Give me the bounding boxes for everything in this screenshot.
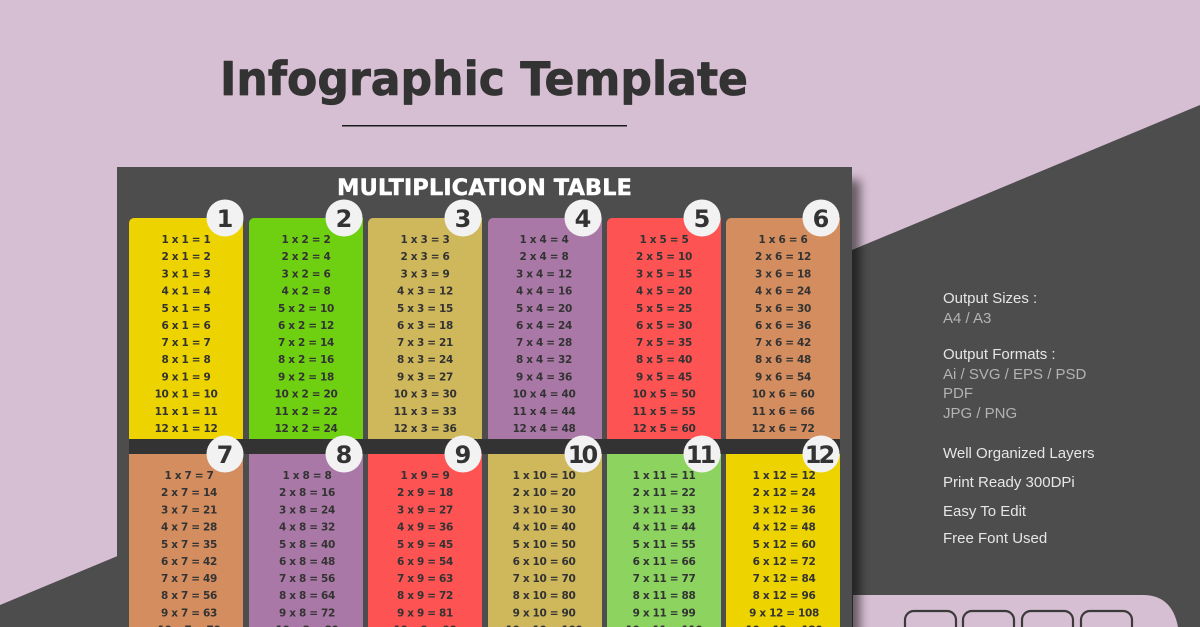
card 1: 4 x 1 = 4 [162,286,211,298]
card 5 [607,200,721,439]
card 2: 11 x 2 = 22 [275,406,337,418]
card 8: 3 x 8 = 24 [279,504,335,516]
format icons [905,611,1132,627]
card 2: 3 x 2 = 6 [282,268,331,280]
card 7 [129,436,244,627]
card 10: 3 x 10 = 30 [513,504,575,516]
card 4: 3 x 4 = 12 [516,268,572,280]
output details text: Output Sizes : [943,290,1037,307]
card 6: 9 x 6 = 54 [755,372,811,384]
card 1: 3 x 1 = 3 [162,268,211,280]
card 10: 10 [568,441,597,469]
card 3: 8 x 3 = 24 [397,354,453,366]
card 4: 8 x 4 = 32 [516,354,572,366]
bottom pill panel [853,595,1178,627]
card 5: 4 x 5 = 20 [636,286,692,298]
card 8: 9 x 8 = 72 [279,608,335,620]
card 7: 1 x 7 = 7 [165,470,214,482]
card 9: 8 x 9 = 72 [397,590,453,602]
card 11: 11 [686,441,715,469]
title: Infographic Template [220,52,748,106]
card 3: 11 x 3 = 33 [394,406,456,418]
card 12: 9 x 12 = 108 [749,608,819,620]
card 7: 7 x 7 = 49 [161,573,217,585]
card 9: 4 x 9 = 36 [397,522,453,534]
card 7: 9 x 7 = 63 [161,608,217,620]
card 1: 12 x 1 = 12 [155,423,217,435]
card 4: 7 x 4 = 28 [516,337,572,349]
card 3: 2 x 3 = 6 [401,251,450,263]
card 2: 1 x 2 = 2 [282,234,331,246]
card 7: 7 [217,441,233,469]
card 4 [488,200,602,439]
card 9: 2 x 9 = 18 [397,487,453,499]
card 7: 4 x 7 = 28 [161,522,217,534]
card 11: 9 x 11 = 99 [633,608,695,620]
card 1 [129,200,244,439]
card 1: 8 x 1 = 8 [162,354,211,366]
card 2: 8 x 2 = 16 [278,354,334,366]
card 3: 12 x 3 = 36 [394,423,456,435]
card 4: 1 x 4 = 4 [520,234,569,246]
card 8: 1 x 8 = 8 [283,470,332,482]
card 5: 9 x 5 = 45 [636,372,692,384]
card 12: 6 x 12 = 72 [753,556,815,568]
card 9 [368,436,482,627]
card 8: 8 [336,441,352,469]
card 9: 9 [455,441,471,469]
card 7: 8 x 7 = 56 [161,590,217,602]
card 10: 1 x 10 = 10 [513,470,575,482]
output details text: Easy To Edit [943,503,1027,520]
card 10: 2 x 10 = 20 [513,487,575,499]
card 1: 1 x 1 = 1 [162,234,211,246]
card 5: 3 x 5 = 15 [636,268,692,280]
card 9: 1 x 9 = 9 [401,470,450,482]
card 4: 10 x 4 = 40 [513,388,575,400]
card 9: 9 x 9 = 81 [397,608,453,620]
title underline [342,125,627,126]
card 2: 2 x 2 = 4 [282,251,331,263]
card 3: 7 x 3 = 21 [397,337,453,349]
card 12: 4 x 12 = 48 [753,522,815,534]
card 12: 7 x 12 = 84 [753,573,815,585]
card 4: 2 x 4 = 8 [520,251,569,263]
card 4: 6 x 4 = 24 [516,320,572,332]
poster heading: MULTIPLICATION TABLE [337,176,632,201]
card 8: 2 x 8 = 16 [279,487,335,499]
card 11: 4 x 11 = 44 [633,522,695,534]
card 11: 2 x 11 = 22 [633,487,695,499]
card 6: 8 x 6 = 48 [755,354,811,366]
card 3: 9 x 3 = 27 [397,372,453,384]
output details text: Print Ready 300DPi [943,474,1075,491]
card 1: 5 x 1 = 5 [162,303,211,315]
card 12: 12 [805,441,833,469]
card 2: 2 [336,205,352,233]
card 3: 1 x 3 = 3 [401,234,450,246]
card 4: 4 x 4 = 16 [516,286,572,298]
card 12 [726,436,840,627]
card 10: 6 x 10 = 60 [513,556,575,568]
card 10 [488,436,602,627]
card 12: 8 x 12 = 96 [753,590,815,602]
output details text: Free Font Used [943,530,1047,547]
card 5: 8 x 5 = 40 [636,354,692,366]
card 2 [249,200,363,439]
card 11: 3 x 11 = 33 [633,504,695,516]
card 7: 3 x 7 = 21 [161,504,217,516]
card 5: 10 x 5 = 50 [633,388,695,400]
card 11: 6 x 11 = 66 [633,556,695,568]
card 6: 11 x 6 = 66 [752,406,814,418]
card 10: 7 x 10 = 70 [513,573,575,585]
card 2: 12 x 2 = 24 [275,423,337,435]
card 11: 5 x 11 = 55 [633,539,695,551]
card 3: 3 [455,205,471,233]
card 5: 7 x 5 = 35 [636,337,692,349]
output details text [943,290,1094,547]
card 5: 12 x 5 = 60 [633,423,695,435]
card 7: 5 x 7 = 35 [161,539,217,551]
card 1: 2 x 1 = 2 [162,251,211,263]
card 6: 7 x 6 = 42 [755,337,811,349]
card 5: 5 x 5 = 25 [636,303,692,315]
output details text: PDF [943,385,973,402]
card 12: 5 x 12 = 60 [753,539,815,551]
card 2: 9 x 2 = 18 [278,372,334,384]
card 3: 4 x 3 = 12 [397,286,453,298]
card 11: 7 x 11 = 77 [633,573,695,585]
card 5: 2 x 5 = 10 [636,251,692,263]
card 6: 1 x 6 = 6 [759,234,808,246]
card 4: 9 x 4 = 36 [516,372,572,384]
card 3: 3 x 3 = 9 [401,268,450,280]
card 10: 4 x 10 = 40 [513,522,575,534]
card 3: 6 x 3 = 18 [397,320,453,332]
card 2: 4 x 2 = 8 [282,286,331,298]
card 2: 6 x 2 = 12 [278,320,334,332]
output details text: Well Organized Layers [943,445,1094,462]
card 1: 7 x 1 = 7 [162,337,211,349]
card 10: 8 x 10 = 80 [513,590,575,602]
card 7: 2 x 7 = 14 [161,487,217,499]
poster shadow [844,180,860,627]
card 5: 11 x 5 = 55 [633,406,695,418]
card 3 [368,200,482,439]
card 6: 6 x 6 = 36 [755,320,811,332]
card 11 [607,436,721,627]
card 3: 10 x 3 = 30 [394,388,456,400]
card 8: 8 x 8 = 64 [279,590,335,602]
card 5: 5 [694,205,710,233]
card 9: 3 x 9 = 27 [397,504,453,516]
card 2: 7 x 2 = 14 [278,337,334,349]
card 12: 1 x 12 = 12 [753,470,815,482]
divider band [129,439,840,454]
card 8: 6 x 8 = 48 [279,556,335,568]
output details text: A4 / A3 [943,310,991,327]
card 9: 6 x 9 = 54 [397,556,453,568]
card 10: 5 x 10 = 50 [513,539,575,551]
card 8: 7 x 8 = 56 [279,573,335,585]
card 6: 6 [813,205,829,233]
card 1: 9 x 1 = 9 [162,372,211,384]
output details text: JPG / PNG [943,405,1017,422]
card 4: 5 x 4 = 20 [516,303,572,315]
card 1: 11 x 1 = 11 [155,406,217,418]
card 9: 7 x 9 = 63 [397,573,453,585]
card 7: 6 x 7 = 42 [161,556,217,568]
poster: multiplication table [117,167,852,627]
card 8 [249,436,363,627]
card 5: 6 x 5 = 30 [636,320,692,332]
card 4: 11 x 4 = 44 [513,406,575,418]
card 6: 5 x 6 = 30 [755,303,811,315]
card 12: 3 x 12 = 36 [753,504,815,516]
card 9: 5 x 9 = 45 [397,539,453,551]
card 6: 3 x 6 = 18 [755,268,811,280]
card 1: 1 [217,205,233,233]
card 6: 2 x 6 = 12 [755,251,811,263]
card 6: 10 x 6 = 60 [752,388,814,400]
card 4: 12 x 4 = 48 [513,423,575,435]
card 8: 4 x 8 = 32 [279,522,335,534]
card 6: 12 x 6 = 72 [752,423,814,435]
output details text: Output Formats : [943,346,1056,363]
card 6 [726,200,840,439]
card 2: 10 x 2 = 20 [275,388,337,400]
output details text: Ai / SVG / EPS / PSD [943,366,1087,383]
card 1: 10 x 1 = 10 [155,388,217,400]
card 3: 5 x 3 = 15 [397,303,453,315]
card 10: 9 x 10 = 90 [513,608,575,620]
card 11: 1 x 11 = 11 [633,470,695,482]
card 11: 8 x 11 = 88 [633,590,695,602]
card 4: 4 [575,205,591,233]
card 5: 1 x 5 = 5 [640,234,689,246]
card 2: 5 x 2 = 10 [278,303,334,315]
card 12: 2 x 12 = 24 [753,487,815,499]
card 1: 6 x 1 = 6 [162,320,211,332]
card 6: 4 x 6 = 24 [755,286,811,298]
card 8: 5 x 8 = 40 [279,539,335,551]
